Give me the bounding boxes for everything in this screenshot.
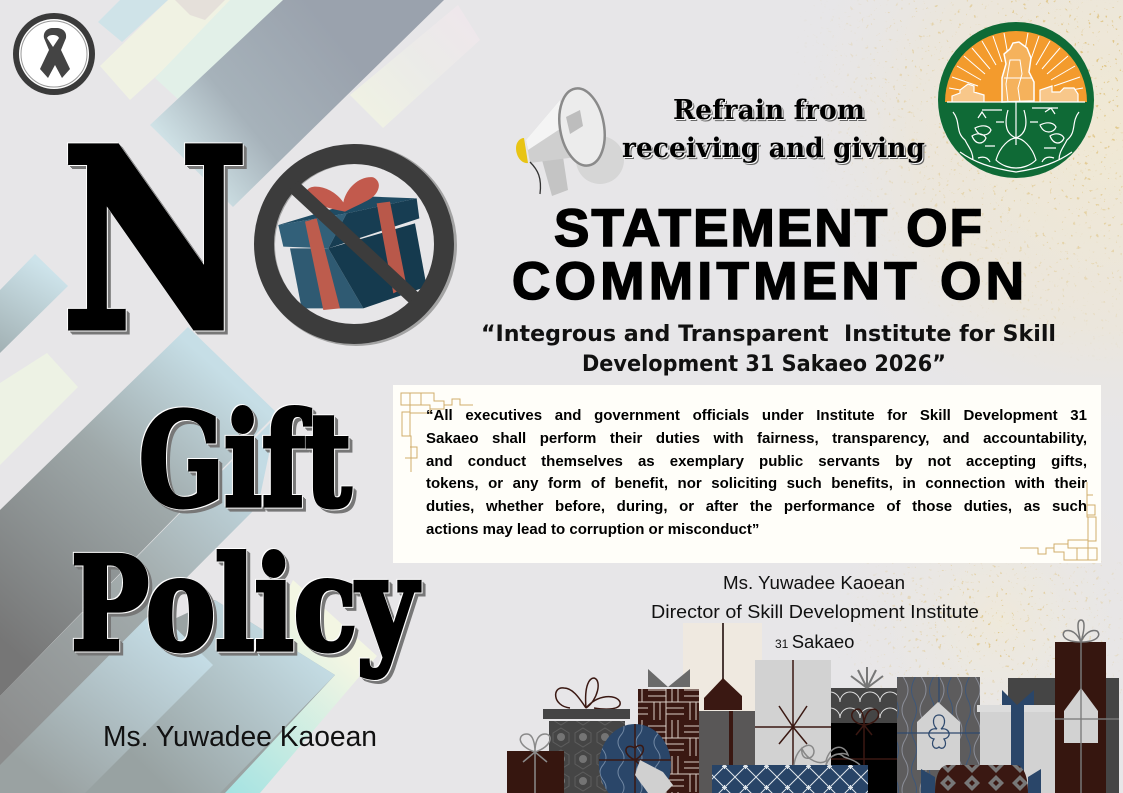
heading: receiving and giving: receiving and giving <box>622 133 925 164</box>
gift: light gray tall <box>755 660 831 793</box>
gift: dark back box <box>1008 678 1119 793</box>
statement body text: actions may lead to corruption or misconduct” <box>426 521 759 538</box>
bow <box>307 177 379 212</box>
gift: brick box <box>638 669 699 793</box>
illustration: stack of gift boxes <box>507 620 1119 793</box>
statement body text: Sakaeo shall perform their duties with fairness, transparency, and accountability, <box>426 430 1087 447</box>
heading: Refrain from: Refrain from <box>673 95 865 126</box>
gift: patterned box with lid <box>543 678 630 793</box>
heading: Gift: Gift <box>139 386 351 536</box>
seal statue <box>1002 42 1034 102</box>
panel: statement box background <box>393 385 1101 563</box>
statement body text: duties, whether before, during, or after the performance of those duties, as such <box>426 498 1087 515</box>
background: beige tint and gold speckles <box>808 0 1123 705</box>
background: diagonal stripes, bottom left <box>0 254 377 793</box>
gift: dark patterned with sunburst <box>831 667 897 728</box>
director name: Ms. Yuwadee Kaoean <box>723 572 905 593</box>
statement body text: “All executives and government officials under Institute for Skill Development 31 <box>426 407 1087 424</box>
gift: black <box>831 709 908 793</box>
icon: no gift prohibition sign <box>264 154 447 336</box>
seal lotus and water linework <box>953 102 1079 172</box>
statement body text: and conduct themselves as exemplary public servants by not accepting gifts, <box>426 453 1087 470</box>
director title: Director of Skill Development Institute <box>651 601 979 622</box>
subheading line 2: Development 31 Sakaeo 2026” <box>582 352 946 377</box>
director institute: 31 Sakaeo <box>775 631 854 652</box>
ornament: bottom right gold corner <box>1020 482 1097 560</box>
gift: light gray lidded <box>977 690 1058 793</box>
icon: black ribbon badge <box>13 13 95 95</box>
gift: brown small <box>507 734 564 793</box>
subheading line 1: “Integrous and Transparent Institute for Skill <box>481 322 1056 347</box>
gift: candy shaped box <box>921 765 1041 793</box>
background: diagonal stripes, top <box>98 0 480 207</box>
gift: brown tall with tag <box>1055 620 1119 793</box>
logo: provincial seal <box>938 22 1094 178</box>
heading: Policy: Policy <box>71 530 420 680</box>
gift: round blue <box>599 724 673 793</box>
ornament: top left gold corner <box>401 393 473 472</box>
heading: STATEMENT OF: STATEMENT OF <box>554 199 982 258</box>
statement body text <box>426 407 1087 538</box>
heading: COMMITMENT ON: COMMITMENT ON <box>512 252 1024 311</box>
title letter N: N <box>62 96 248 386</box>
gift: wave patterned with tag <box>897 677 980 793</box>
statement body text: tokens, or any form of benefit, nor soliciting such benefits, in connection with their <box>426 475 1087 492</box>
gift: dark gray <box>699 711 764 793</box>
author name, bottom left: Ms. Yuwadee Kaoean <box>103 721 377 753</box>
icon: megaphone <box>516 85 624 196</box>
gift: blue lattice foreground <box>712 745 868 793</box>
seal buildings <box>947 84 1085 102</box>
